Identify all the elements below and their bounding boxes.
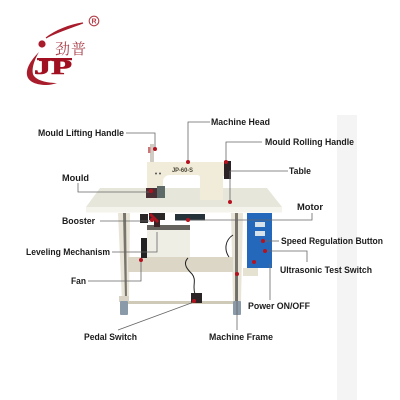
control box xyxy=(247,213,272,268)
machine head: JP-60-S xyxy=(172,167,194,174)
label: Motor: Motor xyxy=(297,201,323,212)
label: Power ON/OFF: Power ON/OFF xyxy=(248,300,310,311)
motor xyxy=(175,214,205,220)
machine illustration xyxy=(86,144,282,315)
label: Table: Table xyxy=(289,165,311,176)
logo: JP brand mark: JP xyxy=(34,55,72,79)
callout leader lines xyxy=(78,122,312,330)
logo: JP brand mark: 劲普 xyxy=(55,38,86,59)
logo: JP brand mark: R xyxy=(91,19,97,26)
logo: JP brand mark xyxy=(27,16,99,85)
machine frame legs and crossbars xyxy=(118,213,258,315)
label: Mould Rolling Handle: Mould Rolling Handle xyxy=(265,136,354,147)
label: Ultrasonic Test Switch: Ultrasonic Test Switch xyxy=(280,264,372,275)
label: Speed Regulation Button: Speed Regulation Button xyxy=(281,235,383,246)
label: Pedal Switch: Pedal Switch xyxy=(84,331,137,342)
under-table assembly: booster, fan and housing xyxy=(140,213,190,258)
label: Machine Frame: Machine Frame xyxy=(209,331,273,342)
label: Mould: Mould xyxy=(62,172,89,183)
label: Machine Head: Machine Head xyxy=(211,116,270,127)
label: Leveling Mechanism: Leveling Mechanism xyxy=(26,246,110,257)
pedal switch xyxy=(191,293,202,303)
label: Fan: Fan xyxy=(71,275,86,286)
machine head xyxy=(146,144,231,200)
cable xyxy=(185,235,233,294)
label: Mould Lifting Handle: Mould Lifting Handle xyxy=(38,127,124,138)
table top xyxy=(86,188,282,212)
label: Booster: Booster xyxy=(62,215,95,226)
callout marker dots xyxy=(139,147,267,303)
